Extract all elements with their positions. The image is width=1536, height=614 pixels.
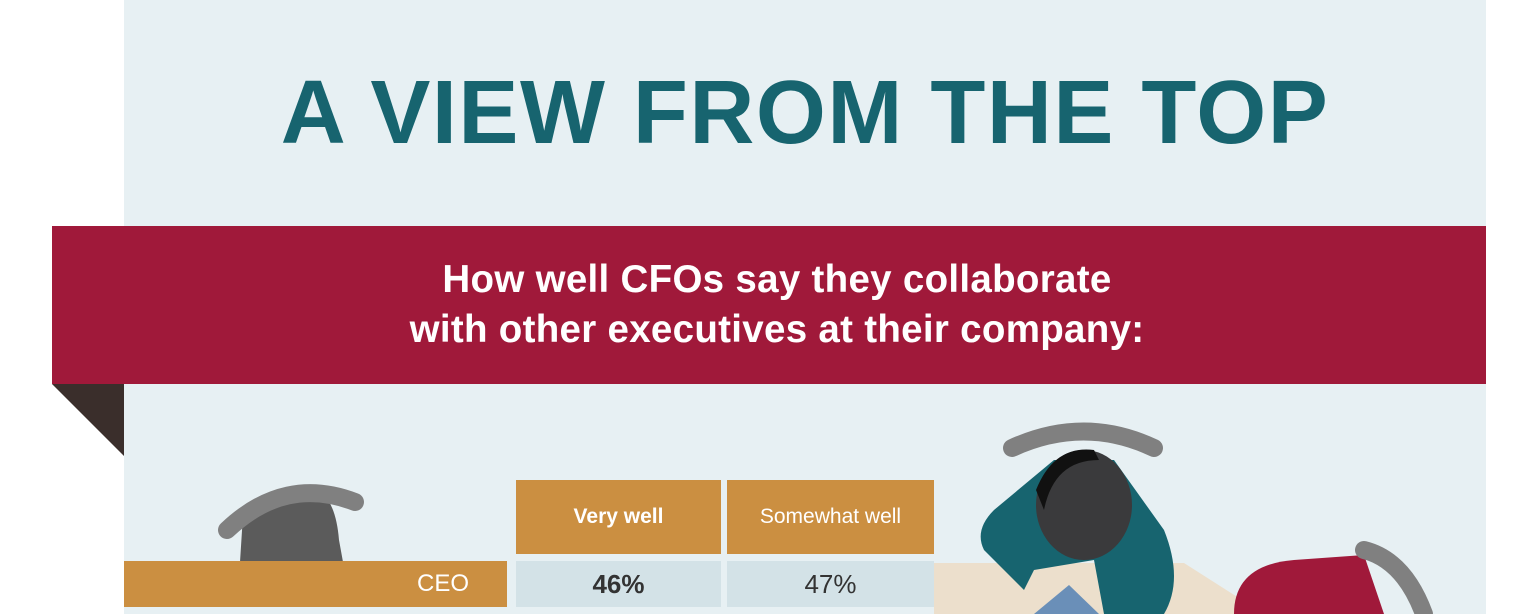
row: CEO: CEO <box>417 570 469 597</box>
red banner <box>52 226 1486 384</box>
illustration: left chair <box>218 484 364 561</box>
table headers: Very well <box>574 505 663 528</box>
text: Somewhat well <box>760 505 901 528</box>
table headers <box>516 480 721 554</box>
red banner: with other executives at their company: <box>410 308 1144 351</box>
ribbon fold <box>52 384 124 456</box>
red banner: How well CFOs say they collaborate <box>442 258 1112 301</box>
row: CEO: 47% <box>804 569 857 599</box>
row: CEO <box>124 561 934 607</box>
title: A VIEW FROM THE TOP <box>281 63 1329 163</box>
illustration: people at table <box>934 422 1433 614</box>
row: CEO: 46% <box>592 569 645 599</box>
